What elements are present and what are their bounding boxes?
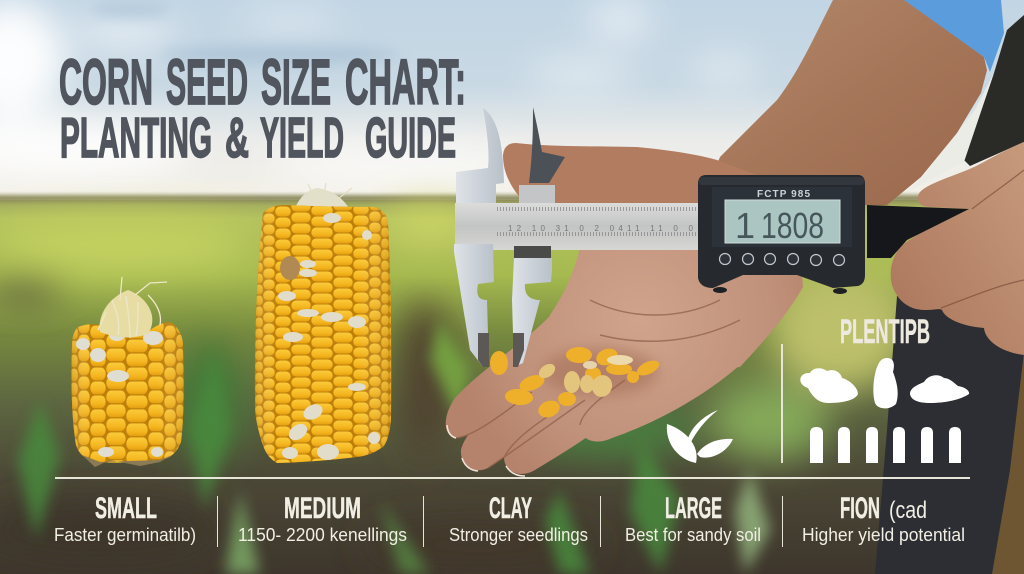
caliper lower jaws [454,244,552,367]
title: YIELD [260,106,344,170]
caliper display body: 1808 [761,205,824,246]
palm [446,248,803,474]
size column: medium: 1150- 2200 kenellings [238,525,407,545]
size column: large: Best for sandy soil [625,525,761,545]
size column: small [54,492,196,545]
size column: clay: Stronger seedlings [449,525,588,545]
icon: seed drop [873,358,898,408]
vertical icon divider [781,344,783,463]
title: CHART: [345,46,466,118]
title: PLANTING [60,106,212,170]
sky sliver beside arm [907,73,994,192]
caliper display body [698,175,865,294]
caliper ruler beam: 12 10 31 0 2 0411 11 0 0 [508,224,694,233]
plenti label: PLENTIPB [840,313,930,351]
caliper display body: FCTP 985 [757,189,810,200]
column dividers [217,496,783,547]
medium corn ear [250,183,395,472]
title: SEED [166,46,248,118]
corn seeds in palm [490,346,661,420]
caliper display body: 1 [735,205,755,246]
title: CORN [59,46,153,118]
right hand gripping caliper [891,142,1024,355]
caliper grip handle [867,205,969,258]
title: SIZE [261,46,331,118]
icon: row of seed bars [810,427,961,463]
size column: fion: Higher yield potential [802,525,965,545]
size column: fion: (cad [889,497,927,524]
size column: medium: MEDIUM [284,492,361,525]
icon: cloud left [800,368,858,403]
icon: leaves [667,410,733,463]
size column: clay: CLAY [489,492,532,525]
sky background with clouds [0,0,1024,205]
icon: cloud right [910,375,969,403]
size column: fion: FION [840,492,880,525]
title: & [225,106,249,170]
size column: small: SMALL [95,492,157,525]
digital caliper [454,107,969,367]
blurred corn field background [0,195,1024,574]
left hand holding seeds [446,143,803,476]
size column: large: LARGE [665,492,722,525]
title [59,46,466,170]
farmer arm and sleeve [700,0,1004,205]
size column: small: Faster germinatilb) [54,525,196,545]
farmer dark clothing [875,15,1024,574]
horizontal rule above size table [55,477,970,479]
title: GUIDE [365,106,456,170]
small corn ear [68,277,188,472]
caliper ruler beam [455,203,698,250]
caliper upper jaws [456,107,565,205]
size column: fion [802,492,965,545]
size column: medium [238,492,407,545]
size column: large [625,492,761,545]
size column: clay [449,492,588,545]
